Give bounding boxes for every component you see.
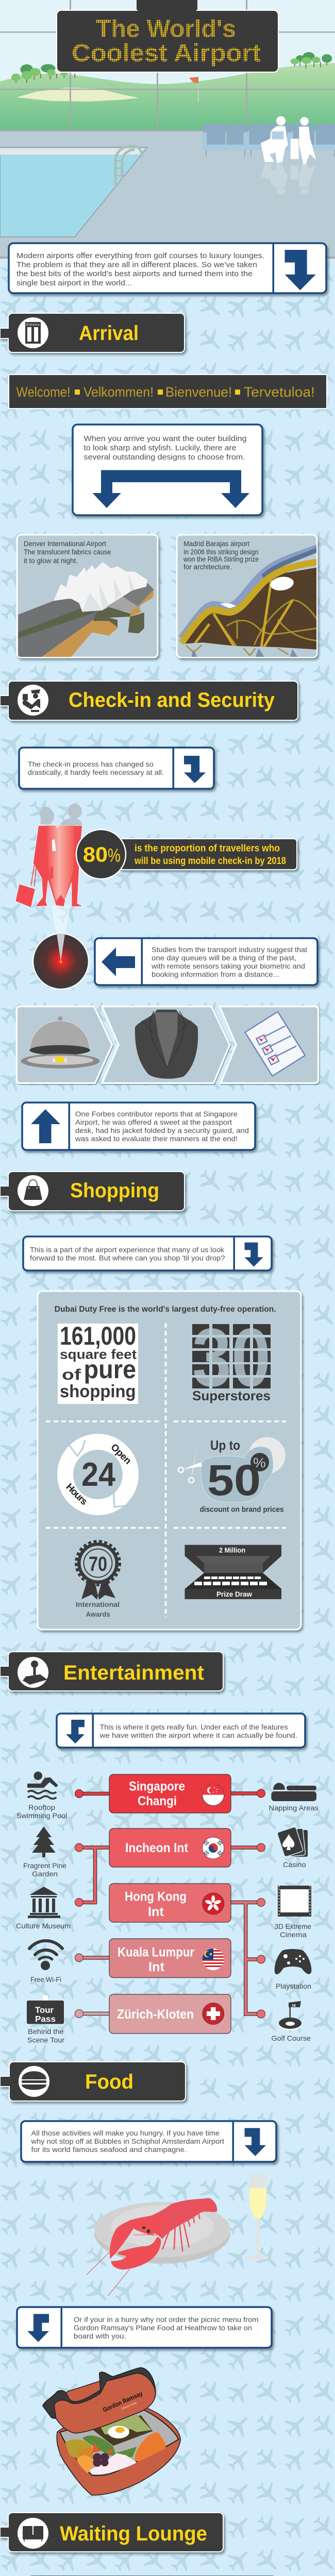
stat: 30 superstores: Superstores (192, 1388, 271, 1403)
illustration: lobster on a plate (87, 2174, 270, 2296)
feature: culture museum (16, 1887, 71, 1930)
food callout: All those activities will make you hungry. If you have time (31, 2129, 220, 2137)
flag: Hong Kong (203, 1893, 224, 1914)
intro callout: The problem is that they are all in different places. So we've taken (16, 261, 257, 269)
airport: Singapore Changi: Changi (138, 1794, 177, 1808)
heading: Waiting Lounge: Waiting Lounge (60, 2522, 207, 2545)
welcome banner (9, 375, 327, 409)
stat: up to 50% discount (178, 1437, 285, 1514)
heading: Entertainment: Entertainment (63, 1662, 204, 1684)
travellers reflection (261, 162, 316, 195)
feature: napping areas (269, 1783, 319, 1812)
icon: burger (22, 2071, 46, 2090)
airport: Zurich-Kloten: Zürich-Kloten (117, 2007, 194, 2022)
icon: game controller (275, 1949, 311, 1974)
stat: 70 international awards: 70 (89, 1553, 107, 1575)
panel: Denver International Airport: it to glow at night. (24, 557, 78, 565)
heading: Food (0, 2062, 186, 2101)
panel: Denver International Airport: Denver International Airport (24, 540, 106, 548)
icon: tour pass: Pass (35, 2014, 56, 2024)
welcome banner: Velkommen! (83, 384, 154, 400)
champagne flute (246, 2174, 270, 2260)
queues callout: with remote sensors taking your biometric and (151, 962, 305, 970)
illustration: Gordon Ramsay picnic bag (43, 2367, 180, 2495)
airport: Incheon Int (109, 1828, 231, 1867)
entertainment callout (57, 1714, 305, 1748)
pool ladder (115, 146, 142, 185)
lounge seats (203, 124, 335, 157)
icon: split arrow (93, 470, 249, 508)
panel: Madrid Barajas airport: for architecture. (183, 563, 232, 571)
illustration: Gordon Ramsay picnic bag: Plane Food (121, 2401, 137, 2411)
flag: Malaysia (202, 1948, 225, 1970)
trees right (291, 52, 332, 69)
icon: bed (271, 1783, 316, 1801)
panel: Madrid Barajas airport: Madrid Barajas airport (183, 540, 249, 548)
stat: 161,000 square feet: of (62, 1366, 81, 1383)
stat: 161,000 square feet: 161,000 (60, 1321, 136, 1350)
stat: 161,000 square feet: square feet (60, 1347, 137, 1362)
Forbes anecdote callout: desk, had his jacket folded by a security guard, and (75, 1126, 249, 1134)
feature: playstation (275, 1949, 311, 1990)
Forbes anecdote callout: Airport, he was offered a sweet at the passport (75, 1118, 232, 1126)
check-in callout: drastically, it hardly feels necessary at all. (28, 768, 164, 776)
icon: entrance door (25, 322, 41, 344)
airport: Kuala Lumpur Int: Int (148, 1960, 165, 1974)
feature: behind the scene tour: Behind the (28, 2027, 64, 2036)
trees left (11, 64, 75, 83)
shopping callout: This is a part of the airport experience that many of us look (30, 1246, 225, 1254)
queues callout: Studies from the transport industry suggest that (152, 945, 307, 954)
heading: Food: Food (85, 2071, 133, 2093)
Forbes anecdote callout (22, 1103, 255, 1150)
feature: behind the scene tour: Scene Tour (27, 2036, 64, 2044)
title sign: The World's (96, 15, 236, 43)
stat: up to 50% discount: % (253, 1455, 266, 1470)
feature: casino (277, 1826, 308, 1869)
picnic callout: Gordon Ramsay's Plane Food at Heathrow to take on (74, 2324, 252, 2332)
airport: Singapore Changi: Singapore (129, 1779, 185, 1793)
airport: Kuala Lumpur Int (109, 1939, 231, 1977)
panel: Madrid Barajas airport: In 2006 this striking design (183, 548, 259, 556)
icon: shopping bag (24, 1180, 42, 1200)
entertainment callout: we have written the airport where it can actually be found. (99, 1731, 297, 1739)
picnic callout: board with you. (74, 2332, 126, 2340)
golf course hills (0, 63, 335, 131)
feature: rooftop swimming pool (16, 1772, 67, 1820)
stat: 70 international awards (76, 1541, 120, 1618)
stat: 2 million prize draw: 2 Million (219, 1546, 245, 1554)
entertainment connectors (75, 1789, 265, 2018)
Forbes anecdote callout: was asked to evaluate their manners at the end! (75, 1134, 238, 1143)
feature: fragrant pine garden: Fragrent Pine (23, 1861, 66, 1870)
feature: golf course: Golf Course (271, 2034, 311, 2042)
panel: Madrid Barajas airport (177, 535, 319, 657)
icon: wifi (29, 1941, 62, 1959)
lobster (87, 2198, 217, 2296)
icon: remote scanner (33, 934, 89, 989)
hero illustration: terminal window, golf course, pool and lounge (0, 0, 335, 259)
stat: 70 international awards: International (76, 1600, 120, 1608)
feature: casino: Casino (283, 1860, 306, 1869)
heading: Arrival: Arrival (79, 322, 139, 345)
golf flag (189, 77, 199, 102)
picnic callout: Or if your in a hurry why not order the picnic menu from (74, 2315, 259, 2324)
stat: up to 50% discount: Up to (210, 1437, 240, 1453)
picnic callout (17, 2307, 272, 2348)
80% statistic: will be using mobile check-in by 2018 (134, 856, 286, 867)
heading: Check-in and Security (0, 681, 298, 720)
Forbes anecdote callout: One Forbes contributor reports that at Singapore (75, 1110, 238, 1118)
welcome banner: Bienvenue! (165, 384, 232, 400)
icon: joystick (23, 1660, 47, 1685)
icon: playing cards (277, 1826, 308, 1857)
welcome banner: Tervetuloa! (244, 384, 315, 400)
80% statistic: is the proportion of travellers who (135, 843, 280, 854)
stat: up to 50% discount: discount on brand prices (200, 1505, 284, 1514)
panel: Dubai Duty Free stats (38, 1291, 301, 1630)
stat: 30 superstores: 30 (192, 1311, 271, 1403)
heading: Shopping: Shopping (70, 1179, 159, 1202)
floor (0, 130, 335, 258)
icon: golf flag: 18 (292, 2004, 296, 2008)
stat: open 24 hours: 24 (81, 1455, 115, 1493)
food callout: for its world famous seafood and champagne. (31, 2145, 187, 2154)
illustration: travellers being scanned (15, 804, 83, 935)
feature: free wi-fi (29, 1941, 62, 1984)
illustration: Madrid terminal (180, 548, 319, 657)
flag: South Korea (203, 1837, 224, 1859)
80% statistic: 80 (83, 843, 108, 867)
icon: entrance door: Entrance (26, 324, 40, 327)
flag: Switzerland (203, 2003, 224, 2025)
intro callout: the best bits of the world's best airports and turned them into the (16, 269, 253, 278)
intro callout: Modern airports offer everything from golf courses to luxury lounges. (16, 251, 264, 260)
feature: 3D extreme cinema (275, 1886, 311, 1939)
icon: folded jacket (135, 1010, 198, 1079)
arrival callout with split arrow: When you arrive you want the outer building (83, 434, 246, 443)
picnic food (65, 2414, 166, 2475)
window frames (0, 0, 335, 130)
feature: rooftop swimming pool: Rooftop (28, 1803, 55, 1811)
arrival callout with split arrow: to look sharp and stylish. Luckily, there are (83, 444, 236, 452)
stat: 70 international awards: Awards (86, 1610, 110, 1618)
airport: Zurich-Kloten (109, 1994, 231, 2033)
seated travellers silhouettes (261, 116, 316, 164)
flag: Singapore (203, 1784, 224, 1806)
airport: Singapore Changi (109, 1774, 231, 1813)
swimming pool (0, 146, 147, 237)
feature: 3D extreme cinema: Cinema (280, 1930, 307, 1939)
heading: Check-in and Security: Check-in and Security (69, 689, 275, 711)
title sign: Coolest Airport (72, 40, 261, 67)
feature: free wi-fi: Free Wi-Fi (30, 1975, 61, 1984)
stat: 2 million prize draw: Prize Draw (216, 1590, 252, 1598)
icon: security officer (23, 689, 40, 712)
queues callout: one day queues will be a thing of the past, (152, 954, 296, 962)
stat: 161,000 square feet: shopping (60, 1382, 136, 1401)
shopping callout (23, 1236, 272, 1270)
icon: evaluation checklist (245, 1012, 305, 1076)
red scanned bodies (33, 825, 83, 907)
icon: tour pass: Tour (35, 2005, 54, 2015)
arrival callout with split arrow: several outstanding designs to choose from. (83, 453, 245, 462)
feature: 3D extreme cinema: 3D Extreme (275, 1922, 311, 1930)
stat: up to 50% discount: 50 (207, 1456, 261, 1504)
icon: museum (28, 1887, 60, 1918)
feature: playstation: Playstation (276, 1982, 311, 1990)
80% statistic: % (108, 845, 121, 866)
sand bunker (16, 88, 139, 101)
icon: scissors (178, 1467, 194, 1483)
suitcase (15, 866, 36, 907)
panel: Dubai Duty Free stats: Dubai Duty Free is the world's largest duty-free operation. (55, 1305, 276, 1314)
silhouette heads (40, 804, 82, 825)
airport: Kuala Lumpur Int: Kuala Lumpur (118, 1945, 194, 1960)
airport: Hong Kong Int: Hong Kong (125, 1890, 187, 1904)
food callout: why not stop off at Bubbles in Schiphol Amsterdam Airport (30, 2137, 224, 2145)
stat: open 24 hours: Hours (63, 1482, 90, 1507)
heading: Arrival (0, 313, 185, 352)
panel: Madrid Barajas airport: won the RIBA Stirling prize (183, 555, 259, 563)
heading: Shopping (0, 1172, 185, 1211)
intro callout: single best airport in the world... (16, 279, 132, 287)
heading: Waiting Lounge (0, 2513, 223, 2552)
feature: fragrant pine garden (23, 1826, 66, 1878)
queues callout: booking information from a distance... (152, 970, 279, 978)
panel: Denver International Airport: The translucent fabrics cause (24, 548, 111, 556)
title sign (57, 0, 278, 72)
icon: sofa (23, 2526, 43, 2541)
illustration: Denver terminal (18, 562, 154, 657)
queues callout (95, 938, 317, 985)
stat: 161,000 square feet: pure (83, 1355, 136, 1384)
picnic bag lid (49, 2368, 156, 2433)
airport: Hong Kong Int: Int (148, 1905, 164, 1919)
airport: Hong Kong Int (109, 1884, 231, 1922)
feature: culture museum: Culture Museum (16, 1922, 71, 1930)
feature: golf course (271, 2001, 311, 2042)
panel: Denver International Airport (17, 535, 158, 657)
intro callout (9, 243, 326, 293)
stat: 2 million prize draw (185, 1545, 281, 1599)
shopping callout: forward to the most. But where can you shop 'til you drop? (30, 1254, 225, 1262)
entertainment callout: This is where it gets really fun. Under each of the features (100, 1723, 288, 1731)
illustration: Gordon Ramsay picnic bag: Gordon Ramsay (102, 2390, 144, 2414)
light beam (51, 905, 71, 935)
heading: Entertainment (0, 1652, 223, 1691)
airport: Incheon Int: Incheon Int (125, 1841, 189, 1855)
check-in callout (19, 748, 214, 789)
arrival callout with split arrow (73, 425, 262, 515)
welcome banner: Welcome! (16, 384, 70, 400)
icon: pine tree (32, 1826, 56, 1857)
icon: cloche with sweet (21, 1016, 100, 1069)
food callout (21, 2121, 276, 2162)
stat: open 24 hours: Open (108, 1442, 133, 1467)
panel: sweet, jacket and checklist (16, 1006, 319, 1083)
check-in callout: The check-in process has changed so (28, 760, 154, 768)
feature: behind the scene tour (27, 1995, 64, 2044)
icon: film strip (278, 1886, 311, 1917)
80% statistic (76, 829, 297, 879)
stat: 161,000 square feet (58, 1321, 138, 1404)
feature: fragrant pine garden: Garden (32, 1870, 58, 1878)
icon: swimmer (27, 1772, 58, 1799)
feature: rooftop swimming pool: Swimming Pool (16, 1811, 67, 1820)
icon: tour pass (27, 1995, 64, 2024)
feature: napping areas: Napping Areas (269, 1804, 319, 1812)
stat: open 24 hours (63, 1440, 133, 1507)
